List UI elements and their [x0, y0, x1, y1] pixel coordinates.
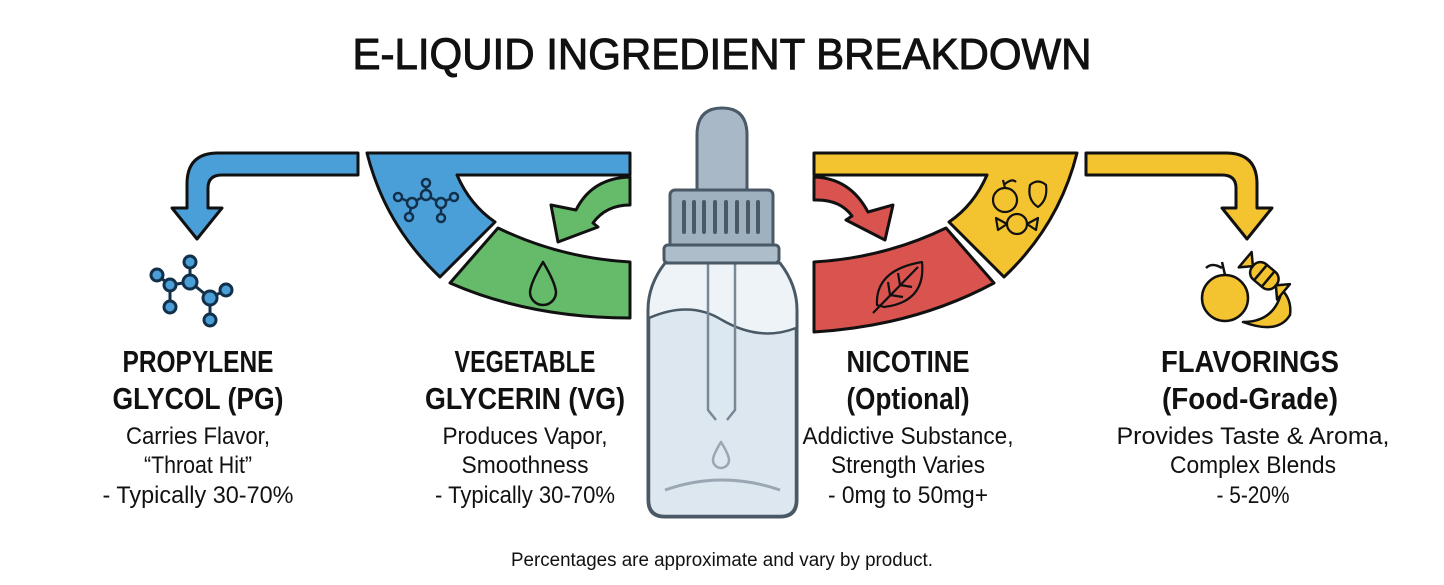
- icon: small molecule: [394, 179, 458, 222]
- liquid: [649, 309, 796, 516]
- text: VG: [425, 344, 625, 509]
- text: VG: GLYCERIN (VG): [425, 381, 625, 416]
- text: VG: - Typically 30-70%: [435, 482, 615, 509]
- text: Flavorings: [1116, 344, 1390, 509]
- arrow: green to VG: [551, 177, 630, 242]
- bottle: [648, 108, 797, 517]
- text: Flavorings: Provides Taste & Aroma,: [1116, 423, 1390, 450]
- arrow: yellow to Flavorings: [1086, 153, 1272, 239]
- text: Nicotine: - 0mg to 50mg+: [828, 482, 988, 509]
- body: [648, 263, 797, 517]
- collar: [664, 245, 779, 263]
- title: E-LIQUID INGREDIENT BREAKDOWN: [352, 30, 1092, 79]
- icon: drop: [530, 262, 556, 305]
- text: PG: - Typically 30-70%: [102, 482, 294, 509]
- text: VG: VEGETABLE: [454, 344, 596, 379]
- text: Nicotine: NICOTINE: [846, 344, 970, 379]
- text: Flavorings: - 5-20%: [1216, 482, 1290, 509]
- left diagram: PG and VG: [172, 153, 630, 318]
- cap: [670, 190, 773, 248]
- footnote: Percentages are approximate and vary by product.: [511, 550, 933, 571]
- text: Nicotine: [802, 344, 1014, 509]
- text: Nicotine: Addictive Substance,: [802, 423, 1014, 450]
- segment: yellow flavorings: [814, 153, 1077, 277]
- segment: red nicotine: [814, 228, 994, 332]
- text: VG: Produces Vapor,: [442, 423, 608, 450]
- text: PG: GLYCOL (PG): [112, 381, 284, 416]
- icon: PG molecule: [151, 256, 232, 326]
- pipette: [708, 263, 735, 420]
- text: Nicotine: (Optional): [846, 381, 970, 416]
- segment: blue PG: [367, 153, 630, 277]
- right diagram: Nicotine and Flavorings: [814, 153, 1272, 332]
- text: Flavorings: (Food-Grade): [1162, 381, 1338, 416]
- text: Nicotine: Strength Varies: [831, 452, 985, 479]
- text: PG: PROPYLENE: [122, 344, 274, 379]
- segment: green VG: [450, 228, 630, 318]
- text: PG: Carries Flavor,: [126, 423, 270, 450]
- arrow: blue to PG: [172, 153, 358, 239]
- icon: leaf: [873, 262, 922, 313]
- text: VG: Smoothness: [462, 452, 588, 479]
- arrow: red to nicotine: [814, 177, 893, 240]
- icon: small fruits: [993, 180, 1046, 234]
- text: PG: [102, 344, 294, 509]
- bulb: [697, 108, 747, 190]
- text: Flavorings: FLAVORINGS: [1161, 344, 1339, 379]
- icon: fruit bundle: [1202, 252, 1290, 327]
- text: Flavorings: Complex Blends: [1170, 452, 1336, 479]
- text: PG: “Throat Hit”: [144, 452, 252, 479]
